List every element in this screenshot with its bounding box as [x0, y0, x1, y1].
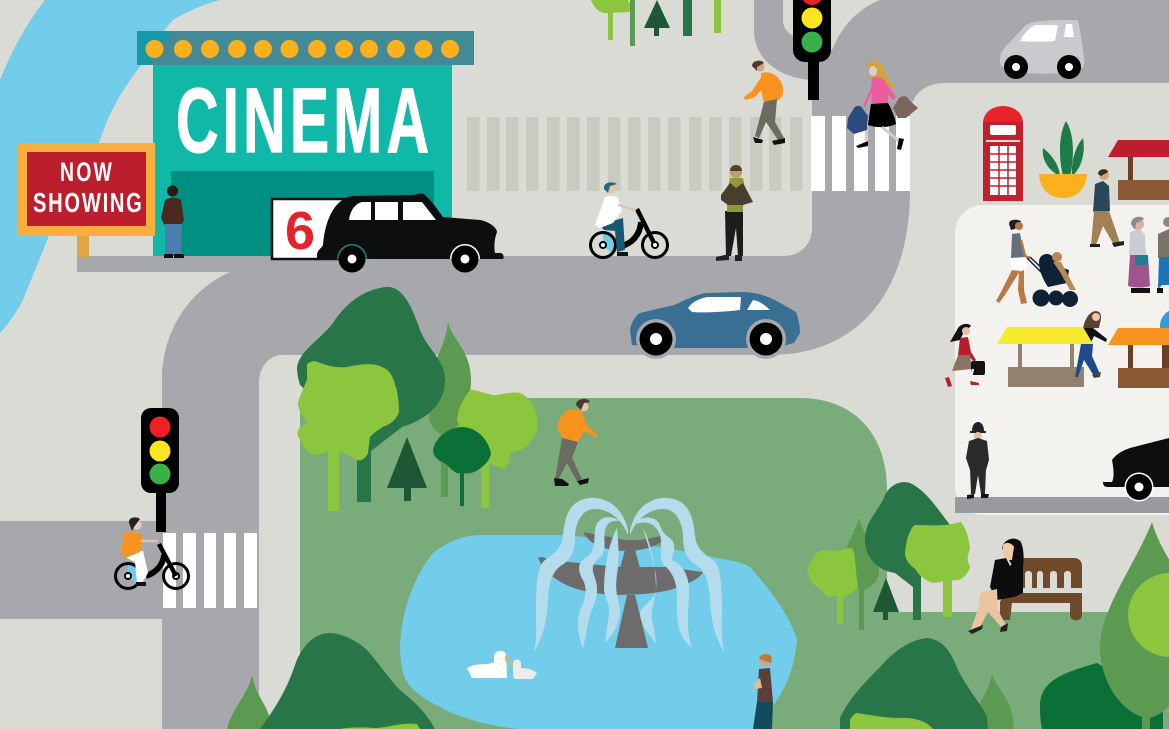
- black taxi right: [1103, 438, 1169, 502]
- park lawn: [300, 398, 1169, 729]
- tree: mid green teardrop: [1100, 522, 1169, 718]
- now showing sign: NOW: [60, 157, 114, 187]
- tree: light green left: [299, 363, 397, 511]
- tree: dark pine: [387, 437, 427, 501]
- market plaza: [955, 205, 1169, 515]
- tree cluster right: [809, 482, 968, 630]
- side road left: [0, 521, 165, 619]
- screen number board: [272, 199, 352, 261]
- cinema marquee: [137, 31, 474, 65]
- person: man walking dark jacket: [1090, 169, 1124, 247]
- fountain water: [534, 498, 724, 652]
- person: police officer: [966, 422, 989, 499]
- tree cluster upper left: [297, 287, 535, 511]
- tree: light green left: [809, 550, 856, 624]
- standing man olive jacket: [716, 165, 753, 261]
- river: [0, 0, 220, 333]
- zebra crossing top: [811, 116, 910, 191]
- person: man walking orange top: [744, 61, 785, 145]
- cinema title: CINEMA: [176, 70, 433, 172]
- fountain: [534, 498, 724, 652]
- tree: light green crown: [850, 713, 933, 729]
- tree: light green right: [459, 392, 535, 508]
- tree: mid green teardrop: [845, 518, 879, 630]
- tree: trunk: [1142, 710, 1150, 729]
- marquee lights: [146, 40, 459, 58]
- now showing sign: [18, 143, 155, 257]
- orange market stall: [1108, 311, 1169, 388]
- cyclist white top: [590, 182, 668, 258]
- top trees: [591, 0, 721, 46]
- marquee over river: [137, 31, 173, 65]
- potted plant: [1039, 121, 1087, 198]
- pond: [400, 535, 797, 729]
- tree cluster bottom left: [227, 633, 435, 729]
- tree: mid green teardrop: [227, 675, 275, 729]
- person: older woman: [1128, 217, 1150, 293]
- red phone box: [983, 106, 1023, 201]
- traffic light left: [141, 408, 179, 532]
- person: woman in red with handbag: [945, 324, 985, 387]
- cinema entrance: [171, 171, 434, 256]
- swan: cygnet: [508, 659, 537, 679]
- yellow market stall: [997, 311, 1107, 387]
- tree: light green crown: [340, 724, 420, 729]
- person: woman with pram: [996, 220, 1078, 307]
- tree: light green circle: [1128, 573, 1169, 657]
- sidewalk crossing stripes: [467, 117, 802, 191]
- tree: dark green with branch: [865, 482, 950, 620]
- swan: adult: [467, 651, 512, 678]
- bench: [1000, 558, 1082, 620]
- tree: mid green teardrop: [970, 675, 1014, 729]
- tree: dark round: [1040, 663, 1163, 729]
- tree cluster bottom middle: [840, 638, 1014, 729]
- cinema building: [137, 31, 474, 256]
- zebra crossing left: [163, 533, 257, 608]
- person: blue shirt at edge: [1160, 311, 1169, 345]
- person: woman at stall: [1075, 311, 1107, 378]
- fountain basin: [538, 532, 703, 648]
- black taxi: [317, 193, 504, 272]
- tree: dark green: [840, 638, 988, 729]
- person: man in park orange top: [554, 399, 598, 486]
- blue car: [630, 292, 800, 359]
- red market stall: [1108, 140, 1169, 200]
- tree cluster lower right: [1040, 522, 1169, 729]
- tree: dark pine: [873, 578, 899, 620]
- cinema facade: [153, 65, 452, 256]
- tree: light green right: [907, 524, 968, 617]
- person: woman on bench: [968, 539, 1024, 634]
- traffic light top: [793, 0, 831, 100]
- swans: [467, 651, 537, 679]
- person: man at right edge: [1157, 217, 1169, 293]
- tree: round dark green: [433, 427, 491, 506]
- tree: big dark green: [297, 287, 445, 502]
- person: woman with shopping bags: [847, 61, 918, 150]
- screen number board: 6: [285, 201, 315, 261]
- person: man by pond: [753, 654, 773, 729]
- silver car: [1000, 20, 1084, 79]
- person: man by cinema: [161, 186, 184, 258]
- tree: mid green teardrop: [428, 322, 471, 497]
- tree: dark green: [260, 633, 435, 729]
- cyclist orange top: [116, 517, 188, 588]
- now showing sign: SHOWING: [33, 188, 144, 219]
- plaza kerb: [955, 497, 1169, 513]
